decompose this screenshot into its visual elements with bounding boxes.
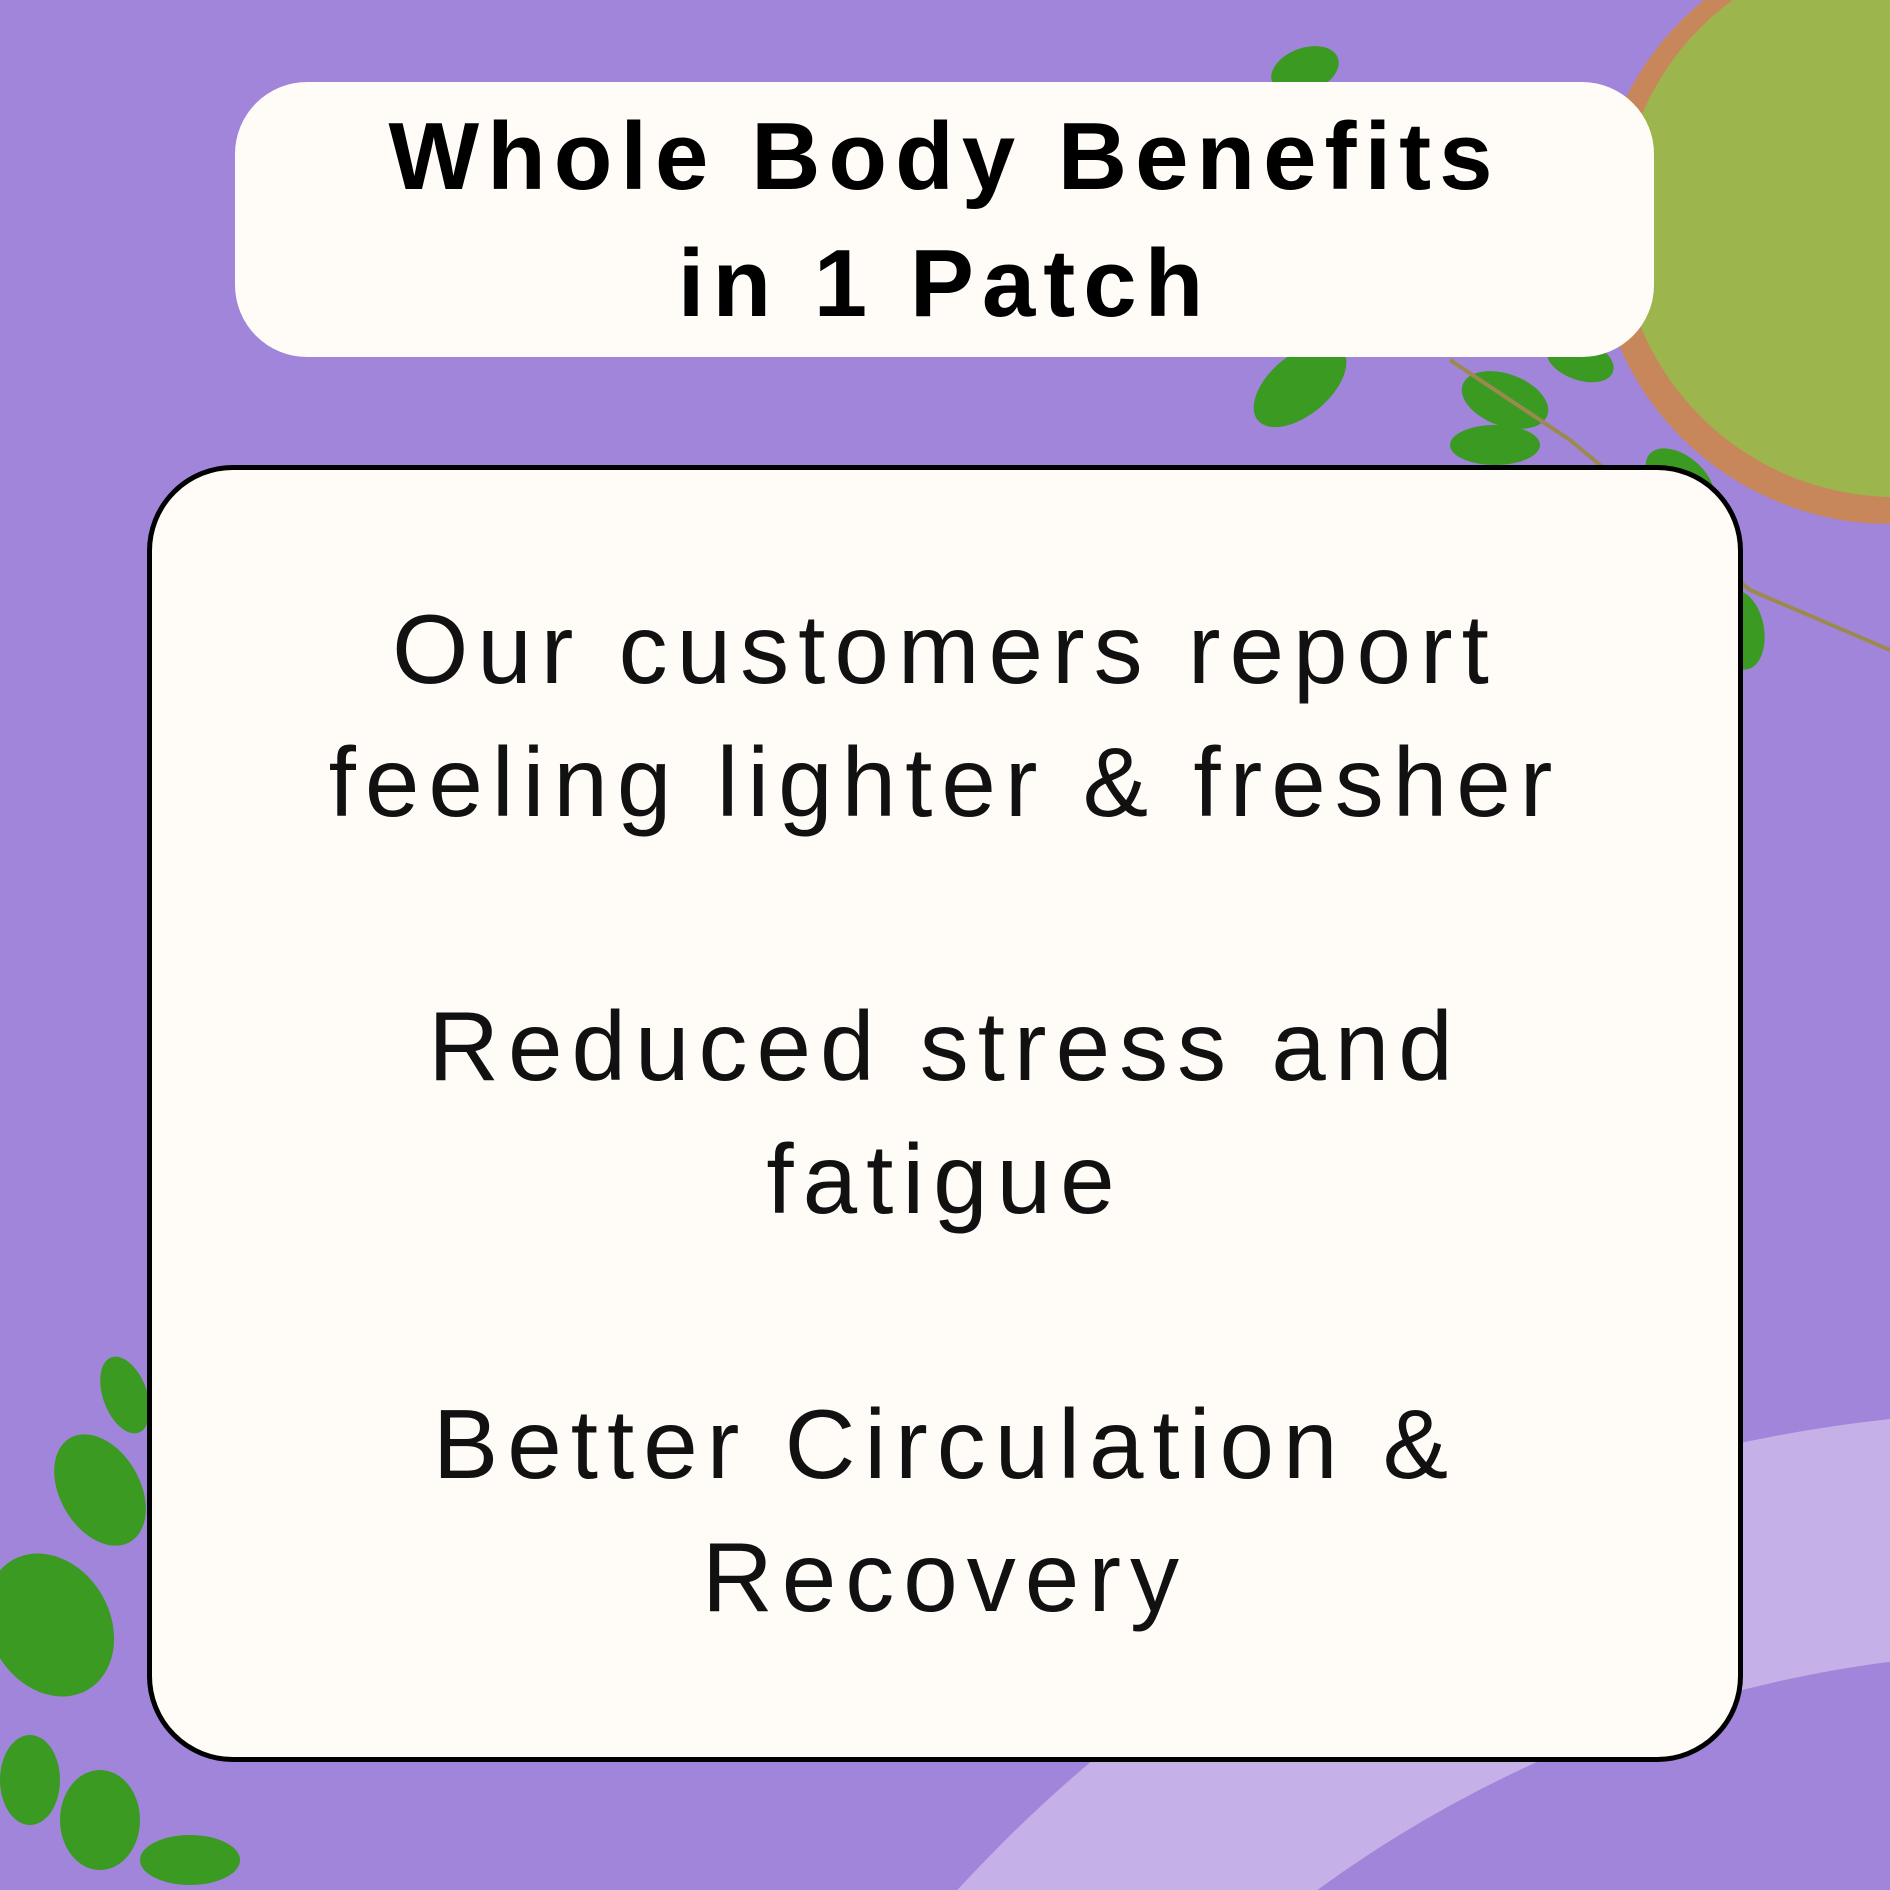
text: reduced stress: fatigue (766, 1124, 1124, 1234)
title: in 1 Patch (678, 230, 1211, 337)
panel: benefits card (147, 465, 1743, 1762)
text: circulation: Better Circulation & (433, 1389, 1457, 1499)
icon: leaves top right (1254, 46, 1890, 670)
title: Whole Body Benefits (388, 103, 1501, 210)
title (235, 82, 1654, 357)
text: customers report: Our customers report (392, 594, 1498, 704)
text: circulation (433, 1389, 1457, 1632)
text: circulation: Recovery (702, 1522, 1188, 1632)
icon: moringa powder bowl (1620, 0, 1890, 524)
text: reduced stress: Reduced stress and (428, 991, 1462, 1101)
icon: leaves bottom left (0, 1356, 240, 1885)
text: customers report (329, 594, 1561, 837)
text: reduced stress (428, 991, 1462, 1234)
text: customers report: feeling lighter & fresher (329, 727, 1561, 837)
